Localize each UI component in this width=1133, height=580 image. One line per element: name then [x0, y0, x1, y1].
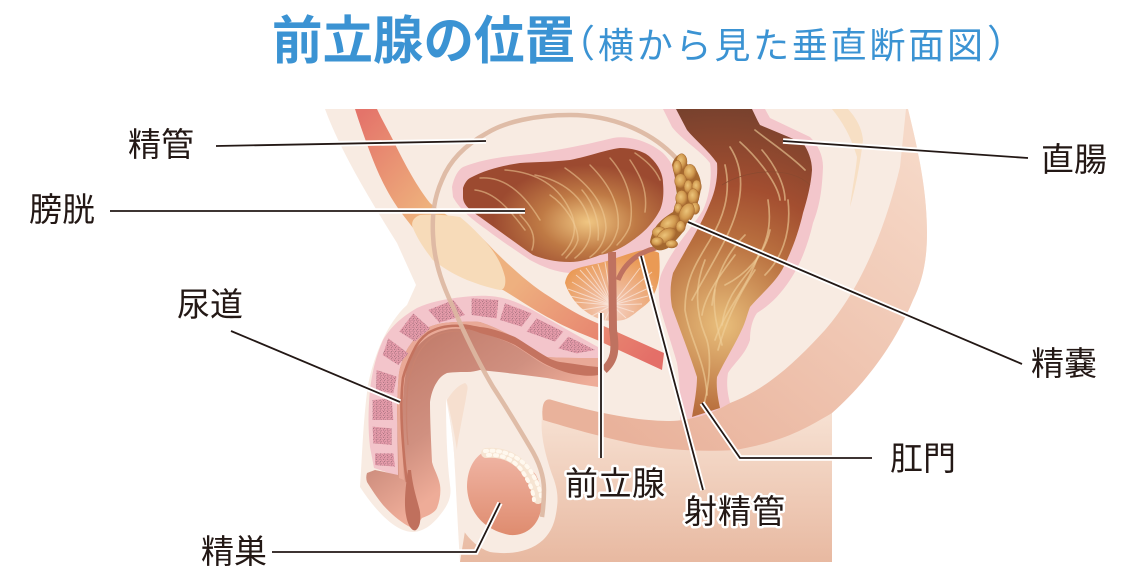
urethra wide section	[460, 324, 598, 376]
rectum	[659, 109, 823, 420]
scrotum skin	[447, 400, 558, 553]
prostate radial lines	[568, 262, 653, 320]
label: 尿道: 尿道	[177, 286, 243, 323]
leader: anus	[702, 403, 872, 458]
subheading	[557, 24, 1025, 66]
erectile tissue blocks	[373, 298, 595, 467]
vesicle base	[650, 154, 701, 250]
rectum contour line	[722, 172, 810, 185]
bladder folds	[475, 153, 660, 258]
body silhouette	[325, 109, 927, 562]
vesicle lobes	[651, 154, 701, 248]
rectal folds	[685, 130, 805, 405]
label: 肛門: 肛門	[890, 440, 956, 477]
urethra left arc	[401, 326, 462, 482]
leader: testis	[272, 503, 500, 552]
urethra tip	[405, 470, 420, 530]
label: 精嚢: 精嚢	[1031, 345, 1097, 382]
pelvic floor muscle	[355, 109, 664, 370]
testis	[467, 451, 542, 535]
label: 前立腺: 前立腺	[565, 465, 665, 502]
epididymis granules	[485, 451, 541, 496]
bladder interior	[463, 148, 663, 262]
main heading: 前立腺の位置	[272, 13, 575, 71]
leader: seminal vesicle	[688, 222, 1022, 364]
leader: prostate	[598, 313, 604, 458]
label: 精巣: 精巣	[201, 533, 267, 570]
epididymis granules inner row	[488, 455, 534, 500]
testis body	[467, 451, 542, 535]
leader: rectum	[783, 141, 1028, 158]
title	[272, 13, 1025, 71]
bladder	[452, 137, 676, 273]
subheading words: 横から見た垂直断面図	[598, 25, 983, 66]
vas deferens	[433, 115, 676, 517]
prostate	[565, 248, 660, 370]
lower body tone	[460, 410, 832, 562]
epididymis base	[486, 453, 538, 499]
label: 精管: 精管	[128, 126, 194, 163]
anatomical diagram	[325, 109, 927, 562]
label: 直腸: 直腸	[1041, 141, 1107, 178]
opening parenthesis: （	[557, 24, 595, 66]
leader: seminal duct	[216, 141, 486, 146]
prostatic urethra	[604, 252, 614, 370]
seminal vesicle	[650, 154, 701, 250]
penis	[366, 296, 598, 530]
thigh inner accent	[447, 383, 468, 450]
leader: urethra	[231, 331, 400, 402]
pubic bone	[412, 215, 505, 290]
urethral lining	[397, 322, 598, 480]
rectal wall	[659, 109, 823, 420]
bladder wall	[452, 137, 676, 273]
inner urethra line	[406, 331, 470, 445]
rectal interior	[671, 109, 812, 417]
ejaculatory duct	[618, 248, 656, 280]
closing parenthesis: ）	[987, 24, 1025, 66]
leader: bladder	[110, 208, 525, 214]
label: 膀胱: 膀胱	[29, 191, 95, 228]
prostate body	[565, 250, 660, 321]
outer hip band	[542, 109, 927, 451]
erectile tissue band	[368, 296, 598, 476]
shaft and glans	[366, 322, 598, 527]
label: 射精管: 射精管	[684, 493, 785, 530]
leader: ejaculatory duct	[641, 256, 703, 490]
pale gluteal accent	[832, 109, 863, 207]
